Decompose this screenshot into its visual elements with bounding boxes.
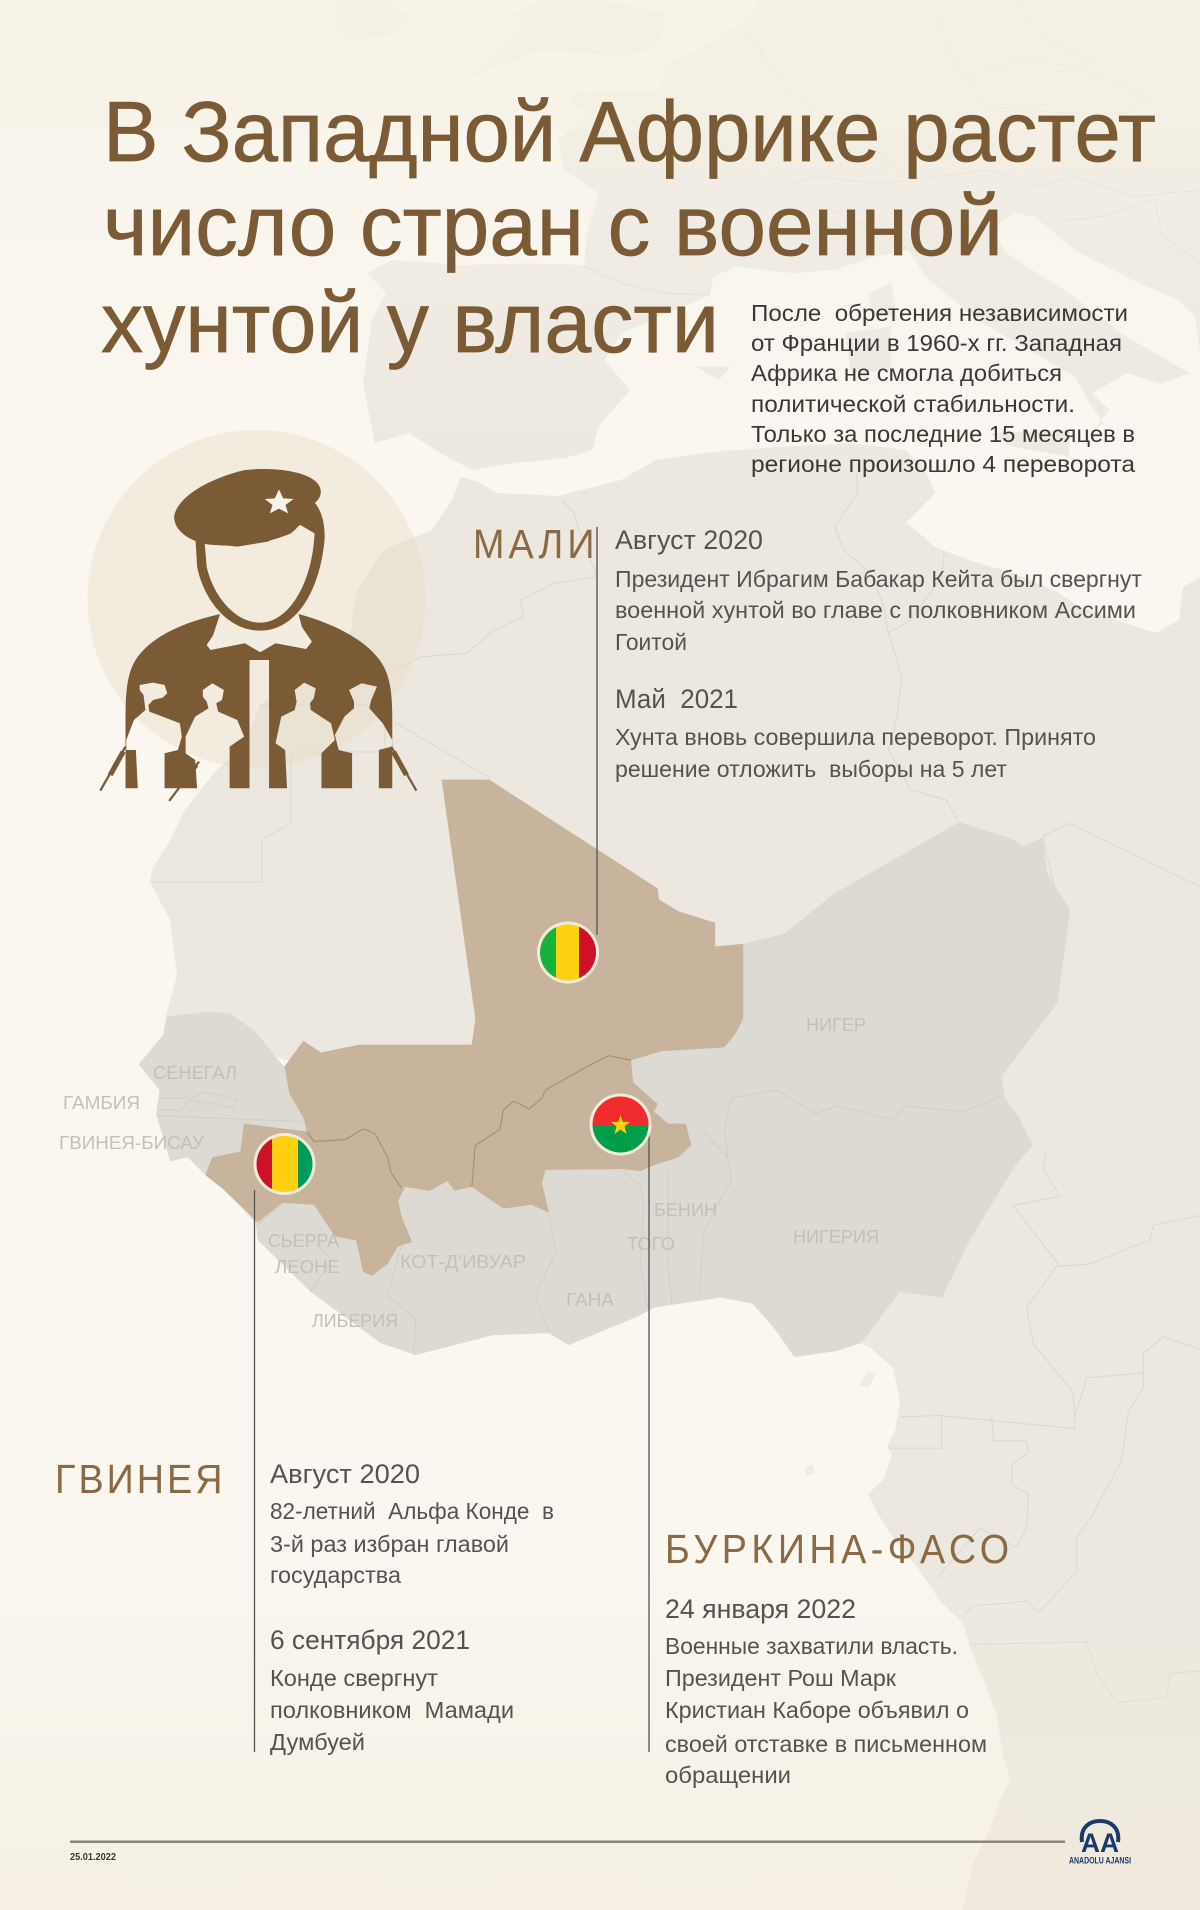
date: 25.01.2022 [70, 1852, 116, 1863]
text block: Guinea August 2020: Август 2020 [270, 1459, 420, 1489]
icon: Anadolu Ajansi logo: AA [1081, 1828, 1119, 1858]
icon: soldier with troops [88, 430, 426, 801]
heading: Guinea: ГВИНЕЯ [55, 1457, 222, 1502]
icon: Guinea flag [254, 1133, 316, 1196]
title: В Западной Африке растет [103, 85, 1156, 180]
country labels on map: СЬЕРРА [268, 1231, 339, 1251]
text block: Guinea September 2021: полковником Мамади [270, 1697, 514, 1723]
footer rule [70, 1840, 1065, 1843]
leader line: Guinea [254, 1190, 256, 1752]
map: Africa land [150, 443, 1200, 1910]
text block: Mali August 2020: Гоитой [615, 629, 687, 655]
text block: Burkina Faso January 2022: обращении [665, 1762, 791, 1788]
text block: Burkina Faso January 2022: Кристиан Каборе объявил о [665, 1697, 969, 1723]
country labels on map: СЕНЕГАЛ [153, 1063, 237, 1083]
text block: Burkina Faso January 2022 [665, 1594, 987, 1788]
icon: rifles [100, 655, 416, 801]
icon: rifle stocks [110, 752, 406, 783]
country labels on map: КОТ-Д'ИВУАР [400, 1252, 526, 1272]
text block: Burkina Faso January 2022: Президент Рош Марк [665, 1665, 897, 1691]
text block: Mali May 2021 [615, 684, 1096, 782]
text block: Mali August 2020: Президент Ибрагим Бабакар Кейта был свергнут [615, 566, 1142, 592]
text block: Guinea August 2020: государства [270, 1562, 401, 1588]
intro text [751, 300, 1135, 477]
country labels on map: ЛИБЕРИЯ [312, 1311, 398, 1331]
intro text: регионе произошло 4 переворота [751, 451, 1135, 477]
icon: shoulders with troop silhouettes [126, 614, 392, 788]
text block: Mali August 2020 [615, 525, 1142, 655]
text block: Guinea September 2021: Думбуей [270, 1729, 365, 1755]
country labels on map: ГАНА [566, 1290, 614, 1310]
icon: star on beret [265, 489, 294, 513]
intro text: После обретения независимости [751, 300, 1128, 326]
country labels on map: НИГЕРИЯ [793, 1227, 879, 1247]
country labels on map: ТОГО [627, 1234, 675, 1254]
title: число стран с военной [103, 179, 1003, 274]
text block: Mali August 2020: Август 2020 [615, 525, 763, 555]
text block: Mali May 2021: Хунта вновь совершила переворот. Принято [615, 724, 1096, 750]
map: North Africa borders [153, 470, 1200, 1703]
text block: Guinea September 2021: 6 сентября 2021 [270, 1625, 470, 1655]
icon: officer head [195, 500, 325, 631]
icon: collar [207, 619, 312, 652]
intro text: Африка не смогла добиться [751, 360, 1062, 386]
heading: Mali: МАЛИ [473, 522, 594, 567]
leader line: Burkina Faso [648, 1135, 650, 1752]
heading: Burkina Faso: БУРКИНА-ФАСО [665, 1527, 1009, 1572]
panel: Guinea [55, 1457, 554, 1755]
icon: Anadolu Ajansi logo [1069, 1821, 1131, 1866]
country labels on map: ГВИНЕЯ-БИСАУ [59, 1133, 205, 1153]
text block: Guinea September 2021: Конде свергнут [270, 1665, 438, 1691]
text block: Guinea August 2020: 3-й раз избран главой [270, 1531, 509, 1557]
country labels on map [59, 1015, 879, 1331]
text block: Burkina Faso January 2022: Военные захватили власть. [665, 1633, 958, 1659]
map: Mali, Burkina Faso, Guinea highlighted [205, 780, 743, 1276]
intro text: политической стабильности. [751, 391, 1075, 417]
icon: Mali flag [537, 922, 599, 984]
text block: Burkina Faso January 2022: своей отставке в письменном [665, 1731, 987, 1757]
text block: Guinea August 2020 [270, 1459, 554, 1588]
leader line: Mali [596, 527, 598, 935]
map: West Africa countries [139, 780, 1070, 1357]
intro text: Только за последние 15 месяцев в [751, 421, 1135, 447]
icon: Burkina Faso flag [590, 1094, 652, 1156]
text block: Guinea September 2021 [270, 1625, 514, 1755]
country labels on map: ГАМБИЯ [63, 1093, 140, 1113]
country labels on map: НИГЕР [806, 1015, 866, 1035]
title [101, 85, 1156, 371]
country labels on map: БЕНИН [654, 1200, 717, 1220]
intro text: от Франции в 1960-х гг. Западная [751, 330, 1122, 356]
icon: beret [174, 469, 321, 546]
icon: Anadolu Ajansi logo: ANADOLU AJANSI [1069, 1856, 1131, 1866]
map: Europe [334, 0, 1200, 470]
text block: Mali May 2021: решение отложить выборы на 5 лет [615, 756, 1007, 782]
panel: Mali [473, 522, 1142, 782]
text block: Guinea August 2020: 82-летний Альфа Конде в [270, 1498, 554, 1524]
text block: Mali August 2020: военной хунтой во главе с полковником Ассими [615, 597, 1136, 623]
text block: Burkina Faso January 2022: 24 января 2022 [665, 1594, 856, 1624]
panel: Burkina Faso [665, 1527, 1009, 1788]
country labels on map: ЛЕОНЕ [275, 1257, 340, 1277]
text block: Mali May 2021: Май 2021 [615, 684, 738, 714]
title: хунтой у власти [101, 276, 719, 371]
